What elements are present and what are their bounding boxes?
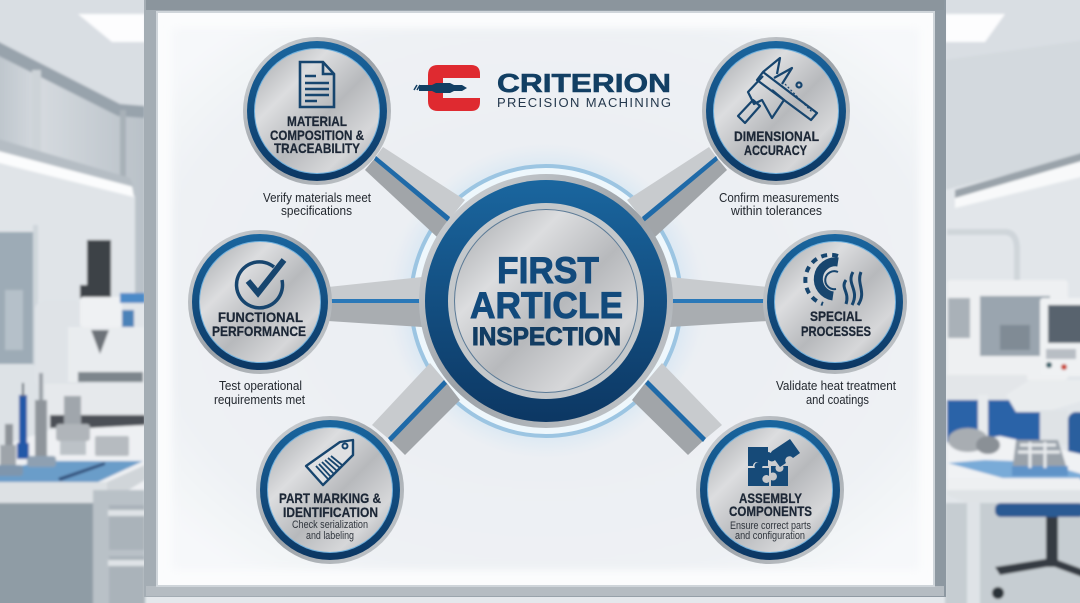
caption: Dimensional: within tolerances xyxy=(730,203,822,218)
caption: Functional: Test operational xyxy=(219,378,302,393)
icon: red C with machining tool xyxy=(414,65,480,111)
halo ring around hub xyxy=(411,166,681,436)
badge: Material Composition and Traceability xyxy=(243,37,391,185)
badge: Special Processes: PROCESSES xyxy=(801,323,871,339)
caption: Functional: requirements met xyxy=(214,392,305,407)
badge: Assembly Components: COMPONENTS xyxy=(729,503,812,519)
badge description: and configuration xyxy=(735,530,805,542)
caption: Material xyxy=(263,190,371,218)
center glow xyxy=(388,143,704,459)
badge: Dimensional Accuracy xyxy=(702,37,850,185)
badge: Special Processes xyxy=(763,230,907,374)
badge description xyxy=(292,519,368,542)
hub title xyxy=(470,250,623,351)
caption: Special xyxy=(776,378,896,407)
badge label: PART MARKING & xyxy=(279,490,381,506)
badge: Part Marking and Identification xyxy=(256,416,404,564)
company name: CRITERION xyxy=(497,68,671,98)
hub title: ARTICLE xyxy=(470,285,623,326)
icon: puzzle pieces xyxy=(748,439,800,486)
icon: gear and flames xyxy=(805,255,862,305)
caption: Dimensional: Confirm measurements xyxy=(719,190,839,205)
company tagline: PRECISION MACHINING xyxy=(497,95,671,110)
hub title: INSPECTION xyxy=(472,323,621,351)
caption: Dimensional xyxy=(719,190,839,218)
badge: Functional Performance: PERFORMANCE xyxy=(212,323,306,339)
hub title: FIRST xyxy=(497,250,599,291)
badge description: Ensure correct parts xyxy=(730,520,811,532)
badge: Material Composition and Traceability: COMPOSITION & xyxy=(270,127,364,143)
badge description xyxy=(730,520,811,542)
connector: center to Special Processes xyxy=(670,277,768,327)
connector: center to Dimensional Accuracy xyxy=(627,147,727,237)
caption: Material: Verify materials meet xyxy=(263,190,371,205)
badge label: ASSEMBLY xyxy=(739,490,803,506)
badge label: FUNCTIONAL xyxy=(218,309,303,325)
badge: Part Marking and Identification: IDENTIFICATION xyxy=(283,504,378,520)
icon: document xyxy=(300,62,334,107)
icon: check mark in circle xyxy=(237,260,284,308)
display board frame xyxy=(144,0,946,597)
connector: center to Functional Performance xyxy=(328,277,422,327)
central hub: First Article Inspection xyxy=(419,174,673,428)
badge: Material Composition and Traceability: TRACEABILITY xyxy=(274,140,361,156)
badge label: DIMENSIONAL xyxy=(734,128,819,144)
logo: Criterion Precision Machining xyxy=(414,65,671,111)
badge label: SPECIAL xyxy=(810,308,862,324)
caption: Functional xyxy=(214,378,305,407)
connector: center to Assembly Components xyxy=(632,363,722,455)
badge: Assembly Components xyxy=(696,416,844,564)
icon: barcode tag xyxy=(306,440,353,485)
icon: caliper xyxy=(738,58,817,123)
badge: Dimensional Accuracy: ACCURACY xyxy=(744,142,808,158)
badge label: MATERIAL xyxy=(287,113,347,129)
caption: Special: Validate heat treatment xyxy=(776,378,896,393)
background: left laboratory scene xyxy=(0,0,145,603)
badge description: and labeling xyxy=(306,530,354,542)
background: right laboratory scene xyxy=(945,0,1080,603)
badge: Functional Performance xyxy=(188,230,332,374)
badge description: Check serialization xyxy=(292,519,368,531)
connector: center to Part Marking xyxy=(372,363,460,455)
caption: Material: specifications xyxy=(281,203,352,218)
caption: Special: and coatings xyxy=(806,392,869,407)
connector: center to Material Composition xyxy=(365,147,465,237)
